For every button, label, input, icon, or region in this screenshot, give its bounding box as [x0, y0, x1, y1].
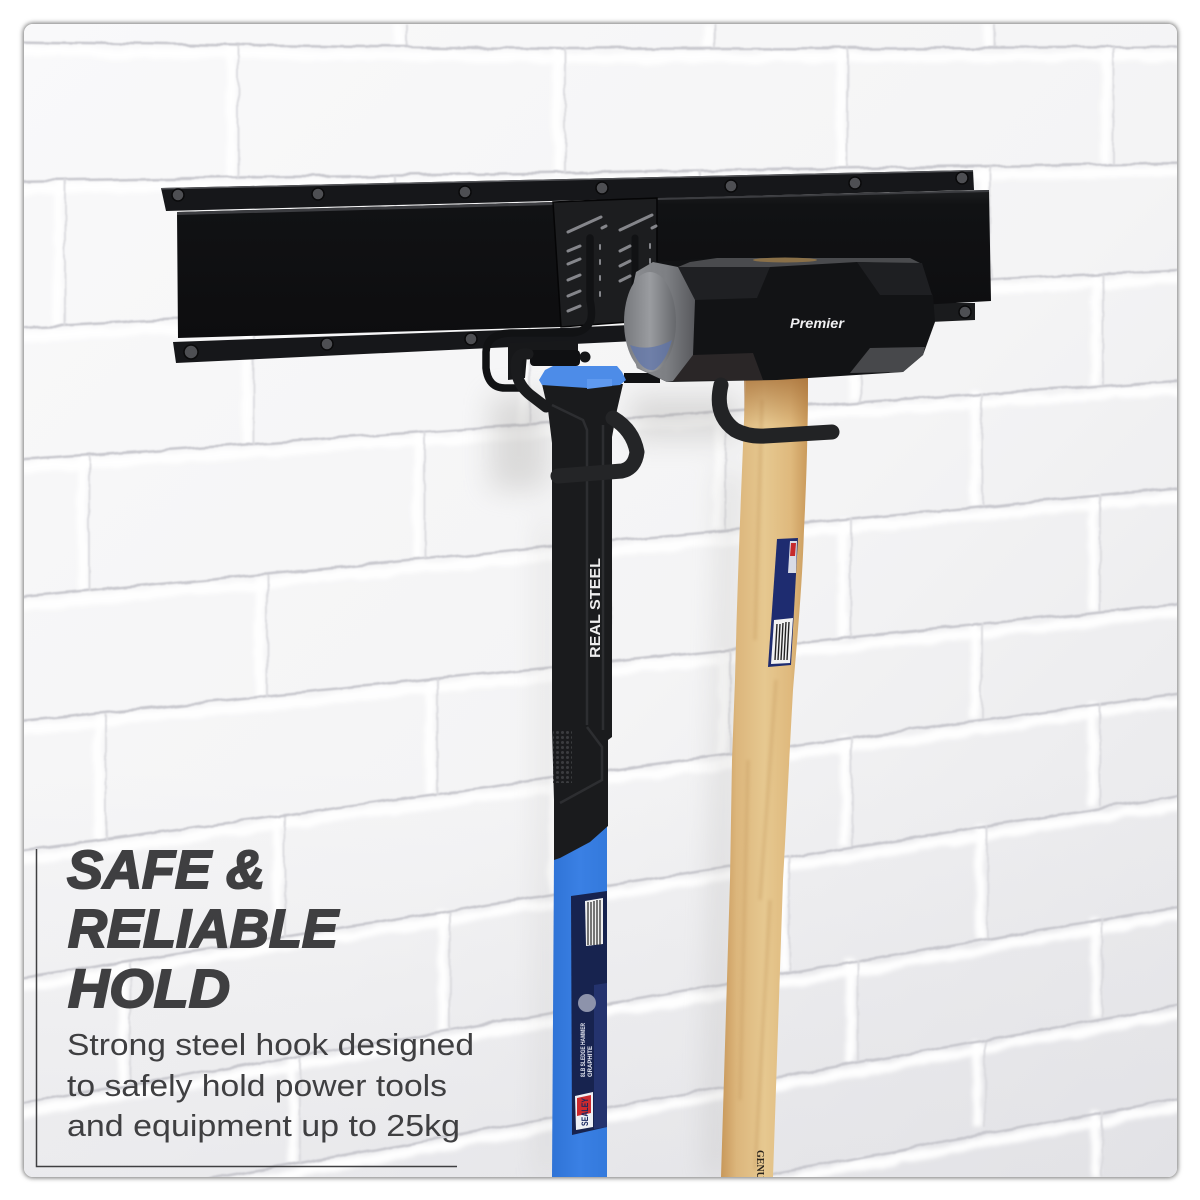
sledge hammer: wooden handle	[721, 372, 808, 1197]
rack lower flange	[173, 325, 626, 363]
fibreglass hammer: handle	[539, 366, 626, 1177]
slotted plate cut-outs	[568, 215, 656, 311]
label product subtext: GRAPHITE	[588, 1046, 594, 1077]
blue shaft	[552, 826, 607, 1177]
sledge hammer: head	[624, 258, 935, 382]
handle stamp text: GENUINE	[754, 1150, 765, 1197]
heading: HOLD	[68, 959, 230, 1019]
label badge	[578, 994, 596, 1012]
body text	[67, 1027, 474, 1143]
steel bevel ring	[633, 262, 695, 382]
screws	[172, 172, 971, 359]
grip texture	[553, 731, 572, 783]
padded hook under sledge head	[719, 385, 832, 436]
heading: SAFE &	[67, 840, 265, 900]
head striking face	[624, 272, 676, 372]
heading	[66, 850, 340, 1008]
caption frame	[36, 849, 457, 1166]
blue cap	[539, 366, 626, 388]
head chamfers	[678, 258, 922, 267]
heading: RELIABLE	[68, 899, 340, 959]
head brand text: Premier	[790, 316, 845, 331]
wall rack back plate	[161, 170, 991, 363]
body text: Strong steel hook designed	[67, 1027, 474, 1062]
body text: to safely hold power tools	[67, 1068, 447, 1103]
roller bracket	[508, 340, 578, 380]
body text: and equipment up to 25kg	[67, 1108, 460, 1143]
label brand logo	[575, 1092, 593, 1130]
label product text: 8LB SLEDGE HAMMER	[581, 1022, 587, 1077]
handle logo text: REAL STEEL	[588, 558, 604, 658]
rack main channel	[177, 190, 991, 338]
black rubber grip	[542, 384, 623, 860]
shaft label	[571, 891, 607, 1135]
rack right flange	[930, 303, 975, 322]
steel storage hook wire	[486, 238, 660, 407]
padded hook around grip	[558, 418, 637, 476]
label on wooden handle	[768, 538, 798, 667]
label brand logo: SEALEY	[580, 1098, 590, 1126]
soft wall shadows around tools	[490, 395, 740, 1177]
rack top flange	[161, 170, 974, 211]
